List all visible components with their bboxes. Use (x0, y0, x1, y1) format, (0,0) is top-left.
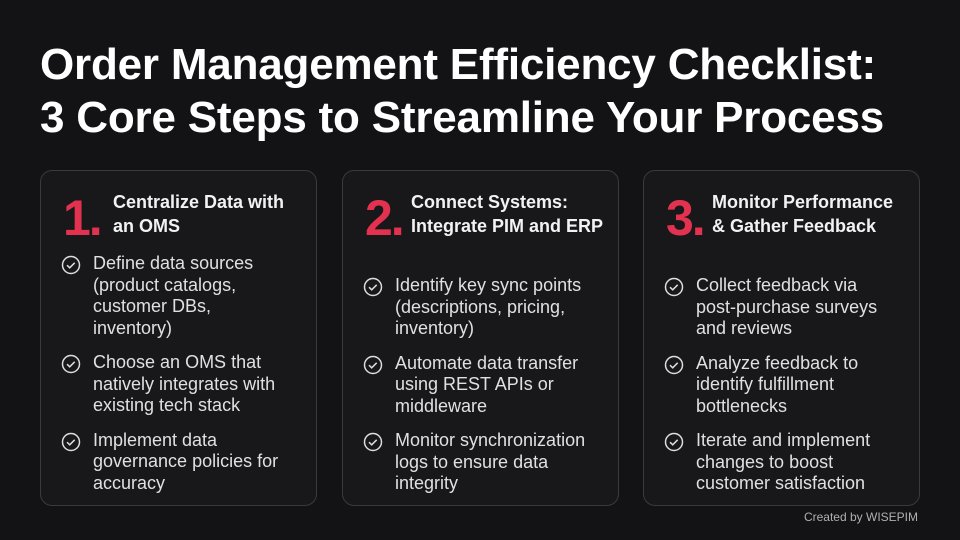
checklist 3 (664, 275, 877, 493)
heading 2: Integrate PIM and ERP (411, 216, 603, 236)
number 3: 3. (666, 190, 704, 246)
checklist 2: Identify key sync points (descriptions, pricing, inventory) (395, 275, 581, 338)
heading 2: Connect Systems: (411, 192, 568, 212)
title: 3 Core Steps to Streamline Your Process (40, 93, 884, 142)
number 2: 2. (365, 190, 403, 246)
checklist 3: Analyze feedback to identify fulfillment bottlenecks (696, 352, 858, 416)
number 1: 1. (63, 190, 101, 246)
checklist 2: Automate data transfer using REST APIs or middleware (395, 352, 578, 416)
heading 1 (113, 192, 284, 236)
checklist 3: Iterate and implement changes to boost customer satisfaction (696, 430, 870, 493)
heading 3 (712, 192, 893, 236)
heading 3: & Gather Feedback (712, 216, 876, 236)
heading 3: Monitor Performance (712, 192, 893, 212)
heading 2 (411, 192, 603, 236)
credit: Created by WISEPIM (804, 510, 918, 524)
panel: step 2 (342, 170, 619, 506)
title: Order Management Efficiency Checklist: (40, 40, 876, 89)
panel: step 1 (40, 170, 317, 506)
checklist 3: Collect feedback via post-purchase surveys and reviews (696, 275, 877, 338)
heading 1: Centralize Data with (113, 192, 284, 212)
checklist 1: Choose an OMS that natively integrates with existing tech stack (93, 352, 275, 415)
checklist 1: Implement data governance policies for accuracy (93, 430, 278, 492)
checklist 2: Monitor synchronization logs to ensure data integrity (395, 430, 585, 493)
panel: step 3 (643, 170, 920, 506)
checklist 1 (62, 253, 278, 493)
heading 1: an OMS (113, 216, 180, 236)
checklist 2 (364, 275, 585, 493)
title (40, 40, 884, 142)
checklist 1: Define data sources (product catalogs, customer DBs, inventory) (93, 253, 253, 338)
